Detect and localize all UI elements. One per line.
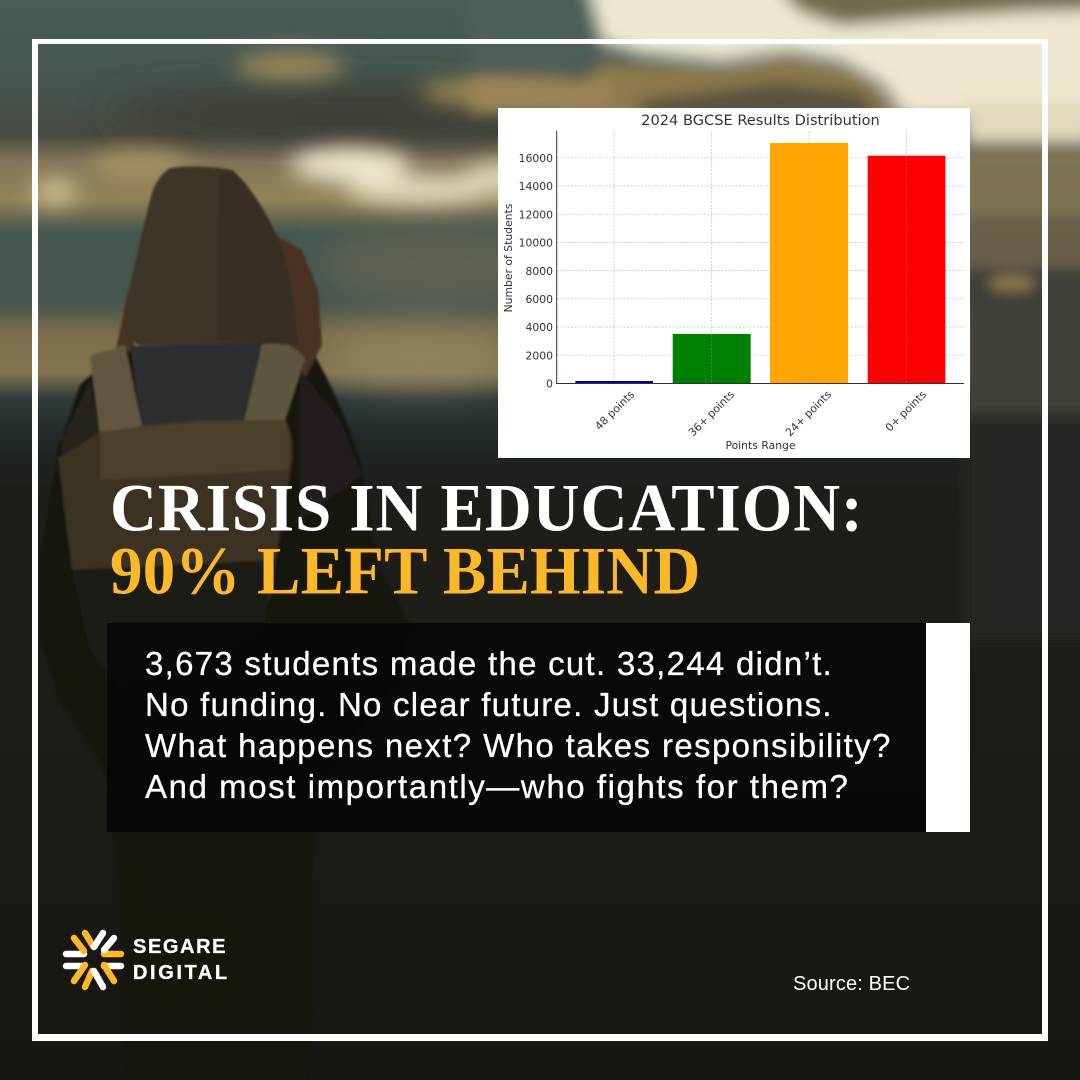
collar	[130, 343, 262, 428]
icon: logo burst	[62, 930, 124, 990]
text panel: dark callout	[107, 623, 926, 832]
x axis labels: 24+ points	[783, 388, 834, 439]
logo: Segare Digital	[62, 930, 230, 990]
fur trim	[116, 235, 322, 378]
child figure	[40, 166, 410, 1080]
chart title: 2024 BGCSE Results Distribution	[641, 112, 880, 129]
y axis labels: 14000	[519, 180, 553, 193]
logo wordmark	[133, 936, 230, 984]
body text: 3,673 students made the cut. 33,244 didn’t.	[145, 645, 833, 682]
soft cloud masses	[110, 90, 570, 380]
title: CRISIS IN EDUCATION:	[110, 471, 864, 546]
x axis labels: 36+ points	[686, 388, 737, 439]
x axis labels: 0+ points	[883, 388, 929, 434]
y axis labels: 10000	[519, 237, 553, 250]
title	[110, 471, 864, 609]
logo wordmark: SEGARE	[133, 936, 227, 958]
y axis labels: 12000	[519, 208, 553, 221]
y axis labels: 2000	[526, 349, 553, 362]
logo wordmark: DIGITAL	[133, 962, 230, 984]
y axis labels	[519, 152, 553, 390]
body and legs silhouette	[40, 350, 410, 1080]
y axis labels: 6000	[526, 293, 553, 306]
axis titles	[502, 203, 796, 452]
backpack body	[58, 420, 292, 650]
title: 90% LEFT BEHIND	[110, 534, 701, 609]
y axis labels: 4000	[526, 321, 553, 334]
body text: And most importantly—who fights for them?	[145, 768, 849, 805]
y axis labels: 0	[546, 378, 553, 390]
bar chart: 2024 BGCSE results distribution	[498, 108, 970, 458]
y axis labels: 8000	[526, 265, 553, 278]
y axis labels: 16000	[519, 152, 553, 165]
body text: No funding. No clear future. Just questions.	[145, 686, 833, 723]
axis titles: Points Range	[725, 439, 796, 452]
body text: What happens next? Who takes responsibility?	[145, 727, 892, 764]
jacket shadows	[60, 380, 100, 470]
backpack straps	[90, 345, 142, 435]
white accent bar	[926, 623, 970, 832]
body text	[144, 645, 892, 806]
x axis labels	[592, 388, 929, 439]
axis titles: Number of Students	[502, 203, 515, 312]
distant tents on the right	[965, 158, 1080, 640]
hood	[128, 166, 298, 345]
source note: Source: BEC	[793, 973, 910, 995]
x axis labels: 48 points	[592, 388, 637, 433]
bars	[575, 143, 945, 384]
bright cream sky top right	[470, 0, 1080, 145]
